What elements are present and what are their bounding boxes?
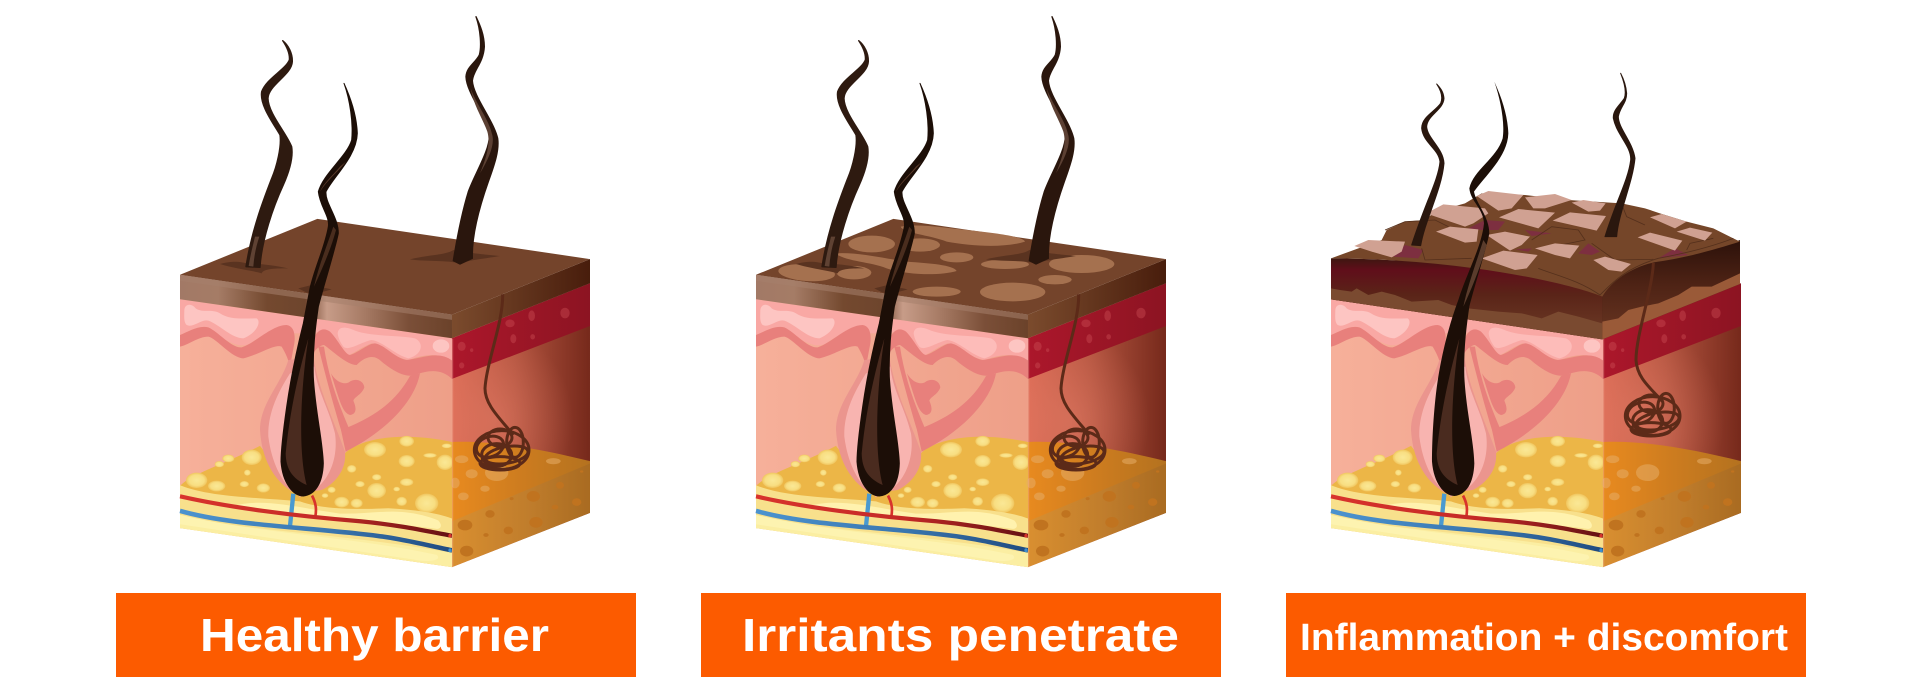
- hairs and follicle: [220, 17, 500, 496]
- label: inflammation + discomfort: Inflammation + discomfort: [1300, 617, 1788, 659]
- hairs and follicle: [796, 17, 1076, 496]
- hairs and follicle: [1412, 73, 1635, 496]
- label: healthy barrier: [116, 593, 636, 677]
- panel: inflammation skin block: [1331, 73, 1741, 567]
- panel: healthy barrier skin block: [180, 17, 590, 567]
- skin block layers: [756, 219, 1166, 567]
- inflamed upper skin band: [1331, 240, 1740, 339]
- label: healthy barrier: Healthy barrier: [200, 609, 549, 661]
- panel: irritants penetrate skin block: [756, 17, 1166, 567]
- irritant patches on skin surface: [778, 226, 1114, 301]
- label: irritants penetrate: Irritants penetrate: [742, 609, 1179, 661]
- skin block layers: [180, 219, 590, 567]
- label: inflammation + discomfort: [1286, 593, 1806, 677]
- skin block layers: [1331, 283, 1741, 567]
- icon: sweat gland: [473, 294, 529, 470]
- flaking skin surface: [1331, 191, 1740, 297]
- icon: sweat gland: [1049, 294, 1105, 470]
- label: irritants penetrate: [701, 593, 1221, 677]
- icon: sweat gland: [1624, 263, 1680, 436]
